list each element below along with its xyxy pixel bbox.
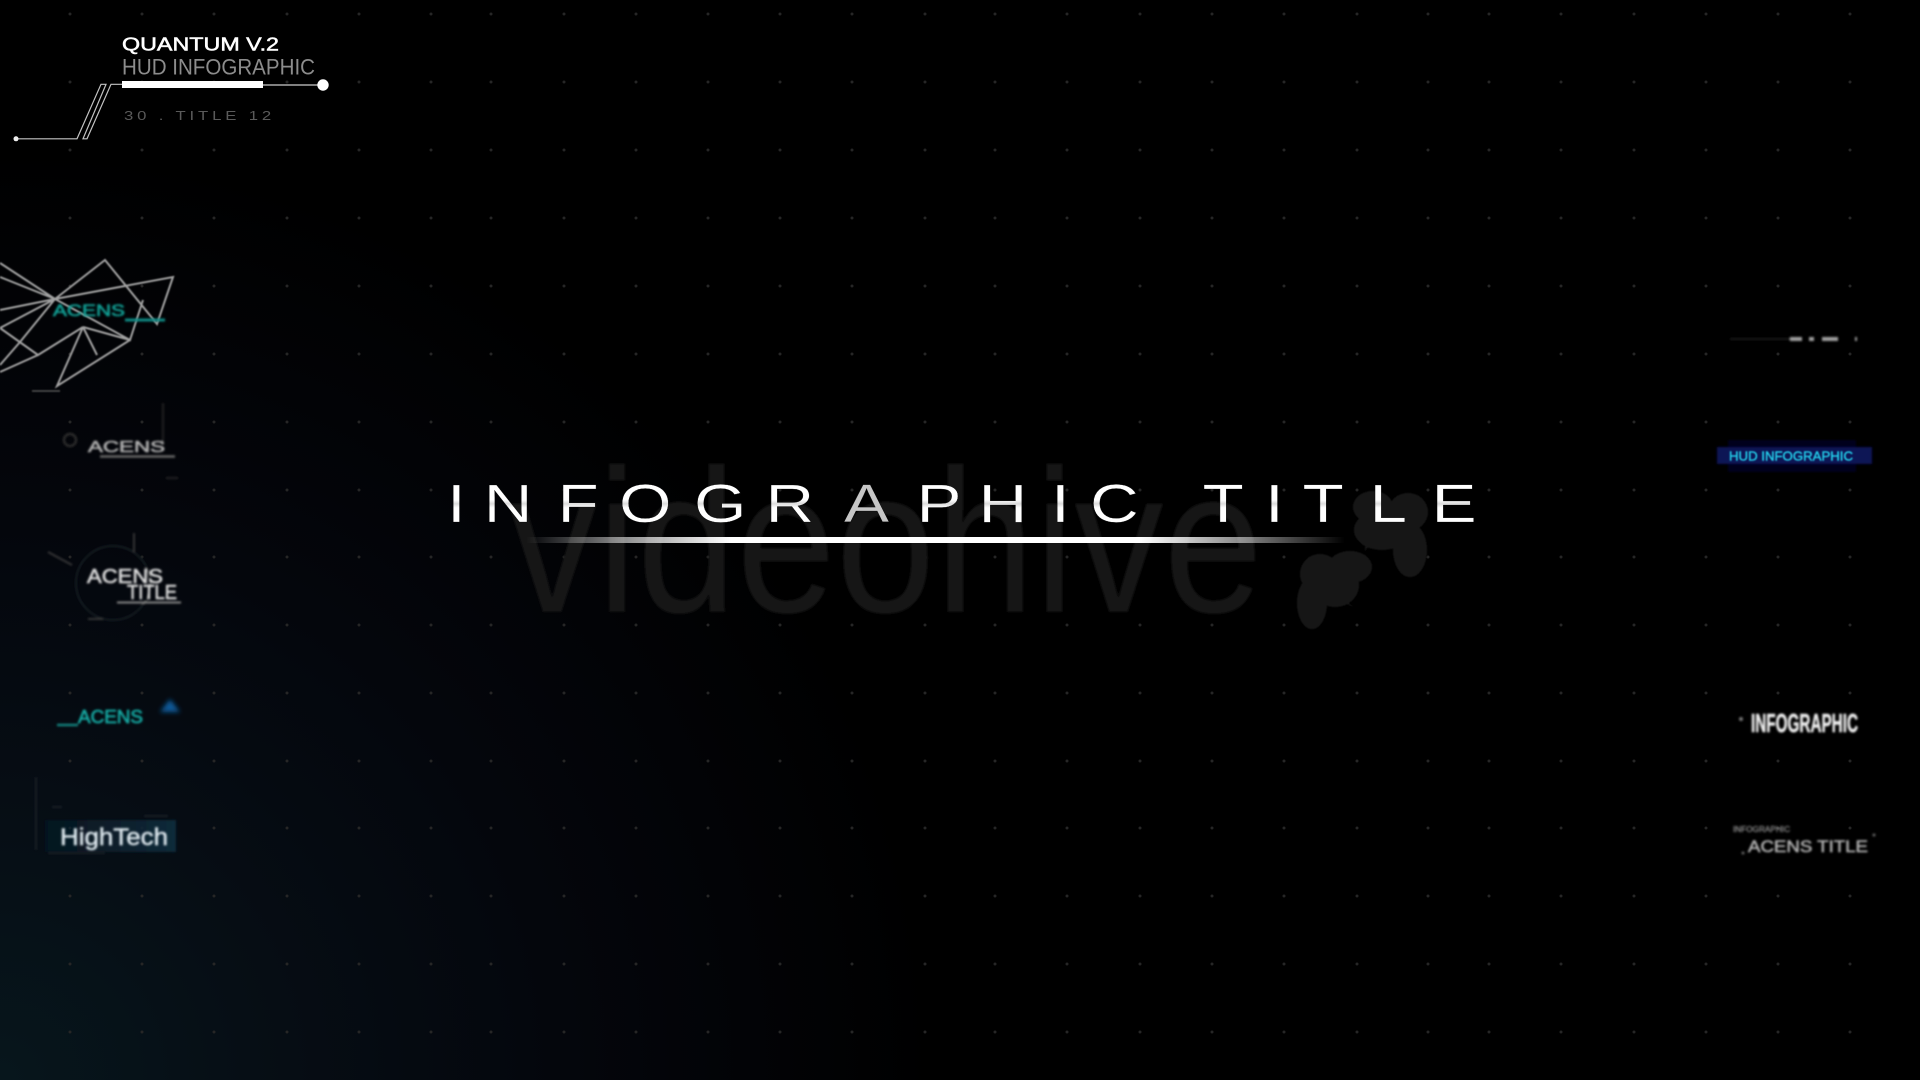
header connector line and node [263,79,329,91]
tick lines [48,533,134,619]
circuit trace [14,84,122,141]
bullet [1739,717,1743,721]
label: HighTech [60,824,168,851]
watermark: videohive [508,427,1428,656]
network lines [0,260,173,386]
header block [14,34,329,141]
panel [1717,447,1872,464]
title underline [526,537,1345,543]
underline [100,455,175,458]
thumbnail: ACENS teal [57,699,180,727]
vertical rule [163,403,178,478]
header title: QUANTUM V.2 [122,34,279,54]
ring [76,546,150,620]
thumbnail: ACENS grey [64,403,178,478]
thumbnail: HighTech [36,777,176,853]
faint line [1730,338,1790,340]
header subtitle: HUD INFOGRAPHIC [122,54,315,80]
ring [64,434,76,446]
header progress bar [122,81,263,88]
dash row [1790,337,1857,341]
watermark logo [1297,491,1428,629]
panel [45,820,176,852]
label: HUD INFOGRAPHIC [1729,450,1853,464]
network label: ACENS [53,301,125,320]
line two: TITLE [127,582,177,604]
underline [117,602,181,604]
accent line [57,724,78,726]
network accent line [125,318,165,322]
thumbnail right: INFOGRAPHIC [1739,708,1858,738]
header caption: 30 . TITLE 12 [124,108,275,123]
main title: INFOGR A PHIC TITLE [447,473,1477,533]
guide lines [36,777,168,853]
blue marker [160,699,180,712]
thumbnail: network ACENS [0,260,173,391]
thumbnail right: dashes [1730,338,1857,340]
thumbnail right: HUD INFOGRAPHIC [1717,440,1872,472]
accent dots [1743,835,1874,853]
label: ACENS TITLE [1748,838,1868,856]
backing panel [1728,440,1856,472]
watermark wordmark: videohive [508,427,1263,656]
label: ACENS [78,707,143,727]
label: ACENS [88,439,165,456]
line one: ACENS [87,566,163,588]
thumbnail: ACENS TITLE [48,533,181,620]
lower tick [32,390,60,392]
small label: INFOGRAPHIC [1733,825,1790,834]
thumbnail right: ACENS TITLE [1733,825,1874,856]
